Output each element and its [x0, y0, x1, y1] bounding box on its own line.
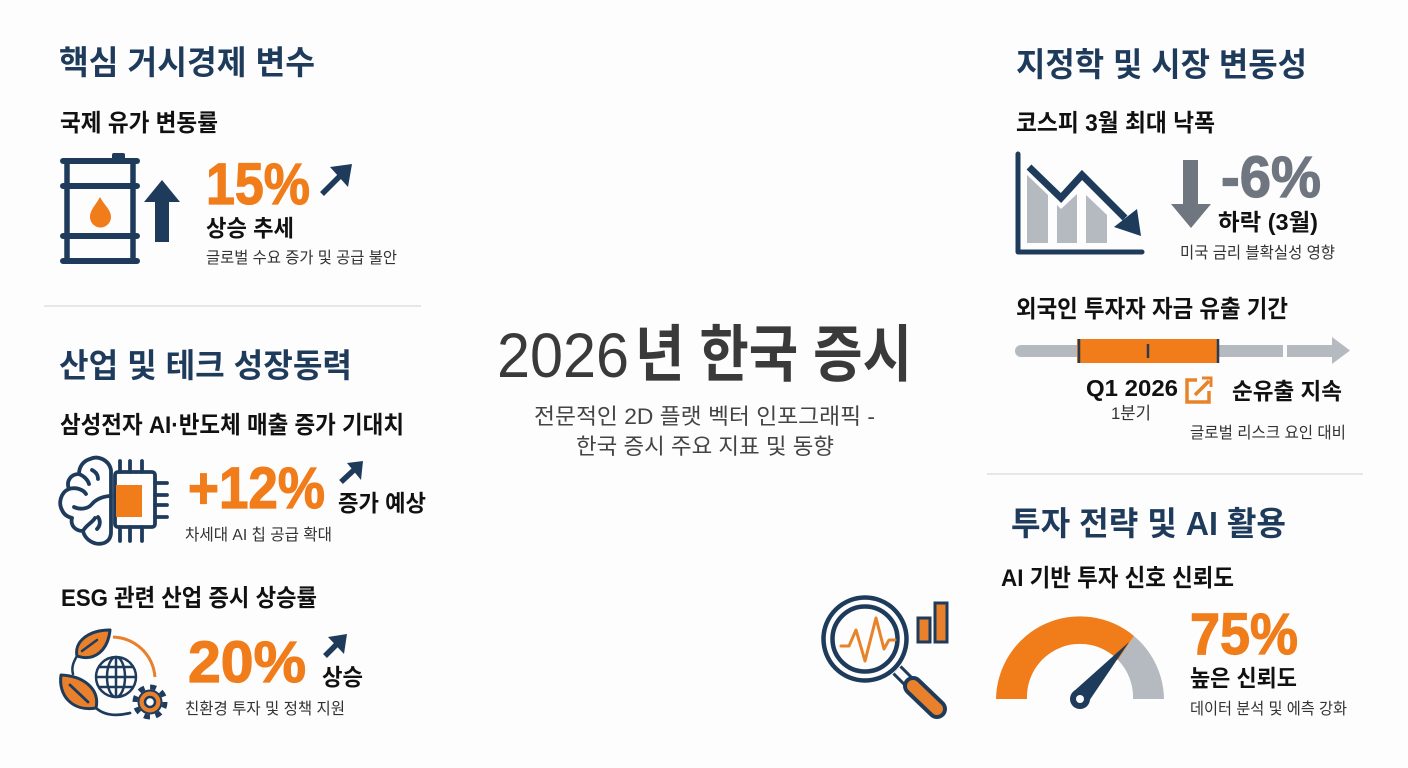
icon: outbound arrow [1187, 378, 1211, 402]
heading: industry and tech: 산업 및 테크 성장동력 [59, 347, 352, 384]
stat: 20%: 20% [188, 630, 306, 695]
icon: brain and chip [60, 458, 167, 544]
label: continued net outflow: 순유출 지속 [1232, 378, 1342, 404]
subtitle line 2: 한국 증시 주요 지표 및 동향 [576, 434, 834, 459]
chart icon: falling bars and arrow [1018, 154, 1142, 252]
timeline bar [1015, 337, 1350, 364]
icon: trend arrow [341, 461, 363, 482]
icon: trend arrow [325, 634, 347, 656]
title [497, 321, 912, 391]
title: 2026 [497, 321, 629, 391]
heading: core macro variables: 핵심 거시경제 변수 [59, 44, 315, 81]
subheading: foreign outflow period: 외국인 투자자 자금 유출 기간 [1016, 296, 1288, 323]
icon: large up arrow [144, 180, 180, 242]
panel: core macro variables [59, 44, 397, 267]
subheading: oil price volatility: 국제 유가 변동률 [60, 110, 218, 137]
stat: 75%: 75% [1190, 602, 1298, 667]
label: expected increase: 증가 예상 [338, 490, 426, 516]
stat: +12%: +12% [188, 456, 325, 521]
subheading: AI signal confidence: AI 기반 투자 신호 신뢰도 [1001, 565, 1234, 592]
label: decline (March): 하락 (3월) [1218, 209, 1318, 235]
label: Q1 2026: Q1 2026 [1086, 375, 1178, 401]
heading: geopolitics: 지정학 및 시장 변동성 [1016, 46, 1307, 83]
panel: industry and tech growth drivers [59, 347, 426, 718]
icon: ESG leaves, globe and gear [61, 630, 165, 717]
icon: magnifier with signal and bars [824, 598, 947, 709]
heading: investment strategy: 투자 전략 및 AI 활용 [1011, 505, 1286, 542]
subheading: Samsung AI chip revenue: 삼성전자 AI·반도체 매출 증가 기대치 [60, 412, 404, 439]
label: rise: 상승 [322, 664, 363, 690]
description: US rates: 미국 금리 블확실성 영향 [1180, 244, 1335, 262]
stat: 15%: 15% [206, 152, 310, 217]
subheading: ESG rise: ESG 관련 산업 증시 상승률 [61, 585, 317, 612]
panel: geopolitics and market volatility [1015, 46, 1350, 442]
label: rising trend: 상승 추세 [206, 215, 294, 241]
label: first quarter: 1분기 [1111, 404, 1151, 423]
subtitle line 1: 전문적인 2D 플랫 벡터 인포그래픽 - [534, 404, 875, 429]
subheading: KOSPI March drop: 코스피 3월 최대 낙폭 [1016, 110, 1215, 137]
gauge: 75% confidence [996, 616, 1164, 709]
title: 년 한국 증시 [635, 321, 912, 390]
description: data analysis: 데이터 분석 및 에측 강화 [1190, 700, 1347, 718]
icon: trend arrow [322, 164, 352, 194]
stat: -6%: -6% [1221, 145, 1321, 210]
title block [497, 321, 912, 459]
label: high confidence: 높은 신뢰도 [1190, 665, 1297, 691]
icon: oil barrel [63, 153, 137, 261]
description: ESG policy: 친환경 투자 및 정책 지원 [185, 700, 345, 718]
icon: down arrow [1171, 160, 1211, 228]
description: oil: 글로벌 수요 증가 및 공급 불안 [206, 249, 397, 267]
panel: investment strategy and AI [824, 505, 1347, 718]
description: AI chip supply: 차세대 AI 칩 공급 확대 [185, 526, 332, 544]
description: global risk: 글로벌 리스크 요인 대비 [1190, 424, 1346, 442]
